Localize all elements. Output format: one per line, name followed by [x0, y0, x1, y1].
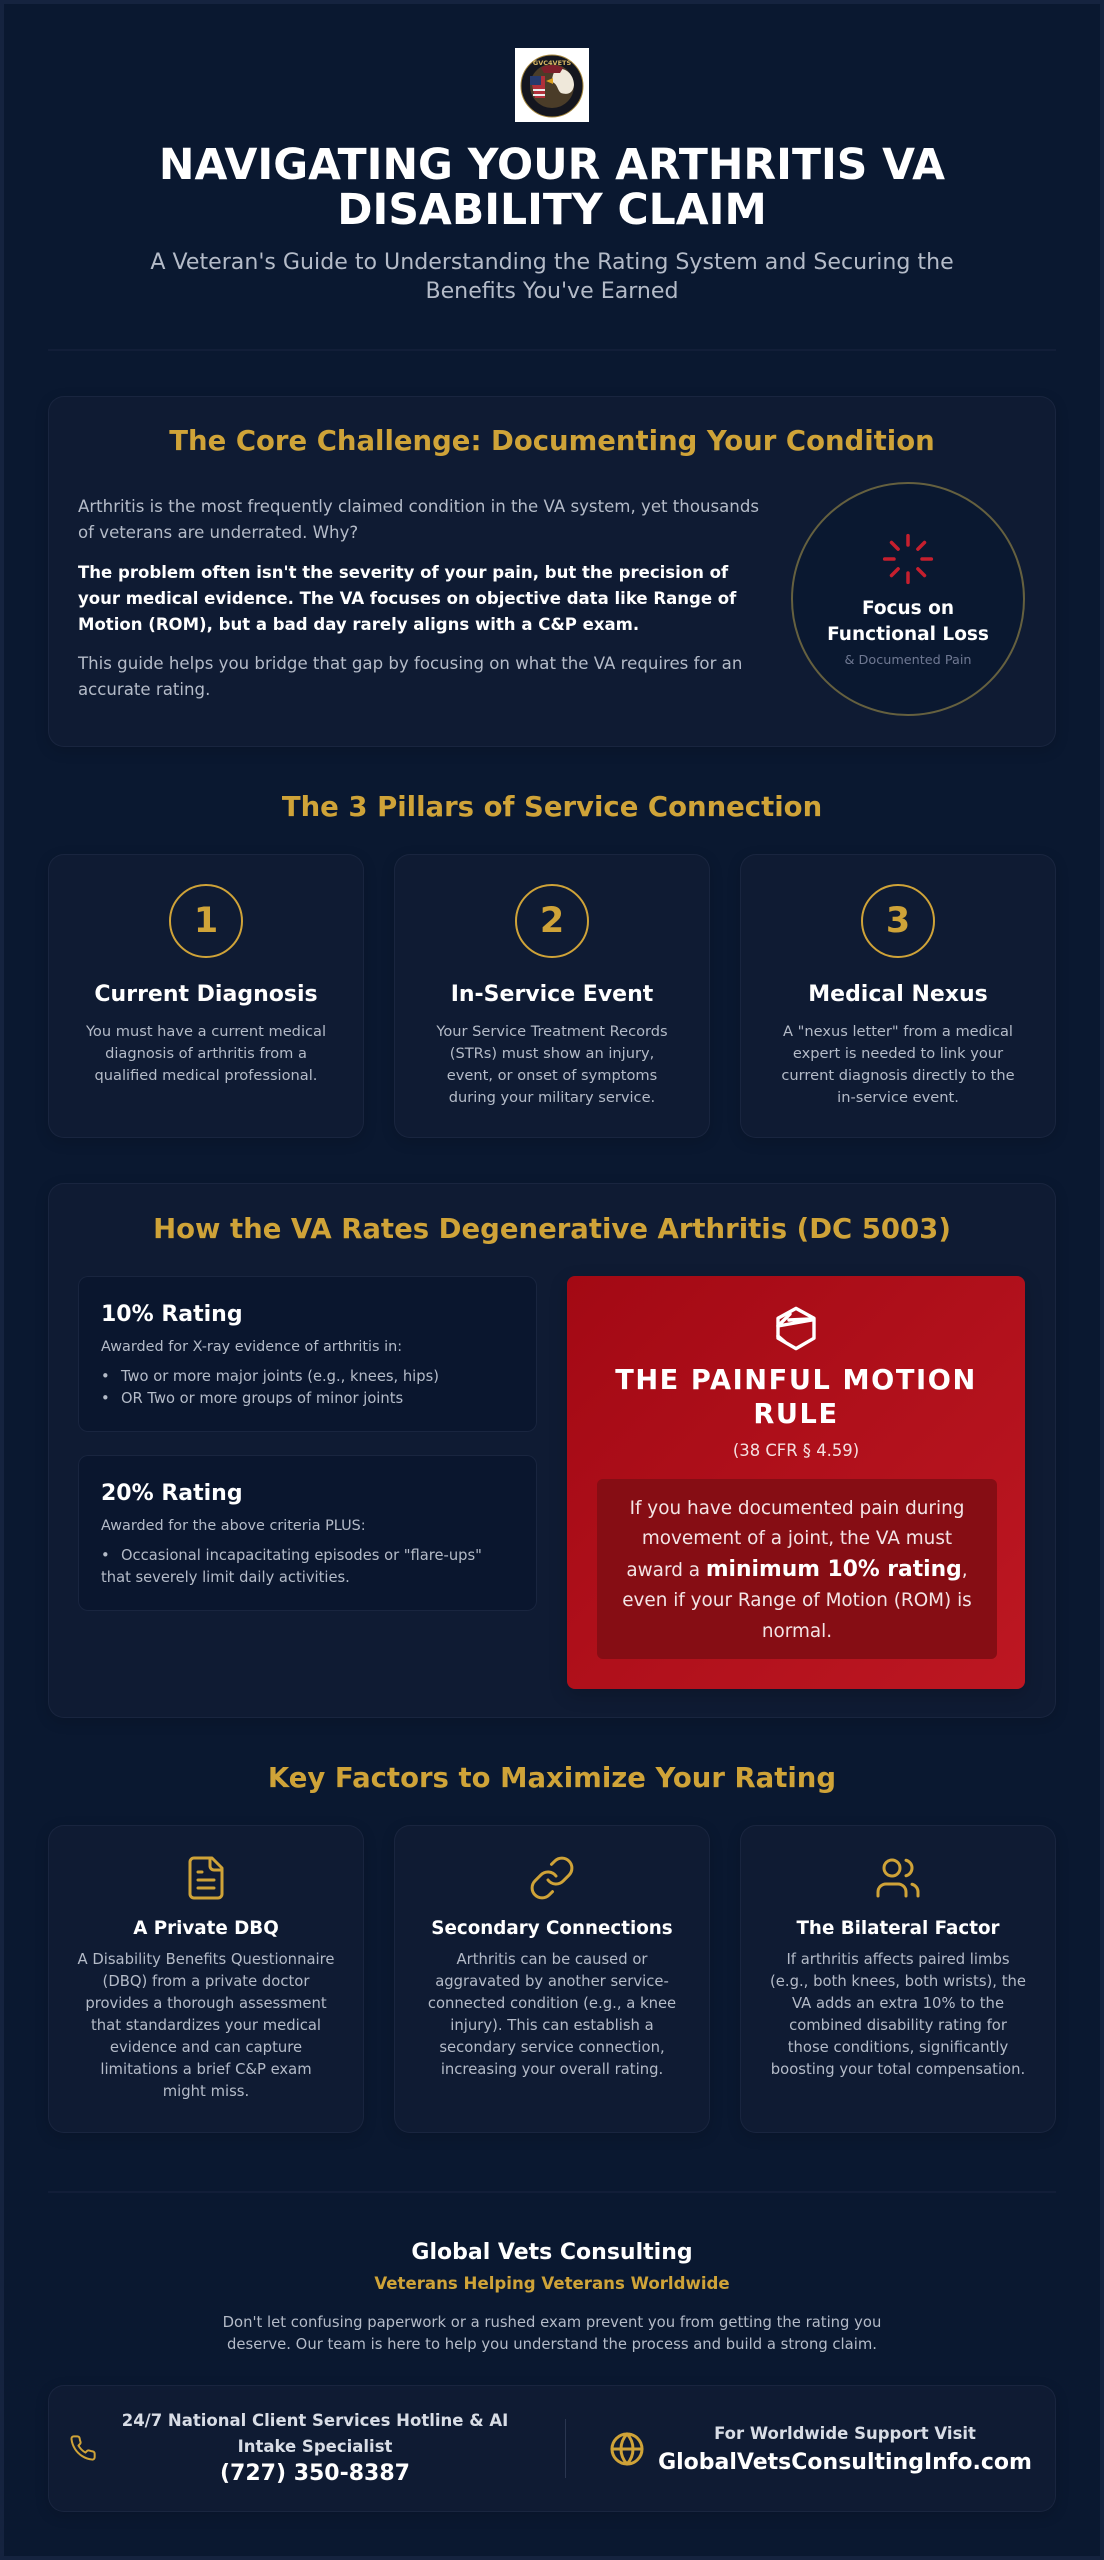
text: intro paragraph: of veterans are underrated. Why?	[78, 523, 358, 542]
secondary connections text: injury). This can establish a	[450, 2017, 654, 2034]
private DBQ text: A Disability Benefits Questionnaire	[78, 1950, 334, 1968]
rule explanation box: movement of a joint, the VA must	[642, 1528, 952, 1549]
panel: pillar 1	[48, 854, 364, 1138]
hotline label	[122, 2411, 508, 2456]
20% bullet: that severely limit daily activities.	[101, 1569, 350, 1586]
panel: pillar 3	[740, 854, 1056, 1138]
private DBQ title: A Private DBQ	[133, 1918, 279, 1939]
10% description: Awarded for X-ray evidence of arthritis in:	[101, 1339, 402, 1355]
number 2	[515, 884, 589, 958]
text: focus on functional loss: Focus on	[862, 598, 954, 619]
bilateral factor text: VA adds an extra 10% to the	[792, 1995, 1004, 2012]
icon: chain link	[530, 1856, 574, 1900]
heading: core challenge: The Core Challenge: Documenting Your Condition	[169, 425, 935, 457]
callout: functional loss circle	[791, 482, 1025, 716]
rule explanation box: award a minimum 10% rating,	[626, 1557, 968, 1582]
pillar 3 title: Medical Nexus	[808, 982, 988, 1007]
icon: phone	[70, 2435, 96, 2461]
20% heading: 20% Rating	[101, 1481, 243, 1506]
heading: key factors: Key Factors to Maximize Your Rating	[268, 1762, 836, 1794]
logo: GVC4VETS	[533, 59, 571, 67]
panel: core challenge	[48, 396, 1056, 747]
pillar 1 text: You must have a current medical	[86, 1023, 326, 1040]
10% bullets: Two or more major joints (e.g., knees, hips)	[121, 1368, 439, 1384]
panel: private DBQ	[48, 1825, 364, 2133]
footer: tagline: Veterans Helping Veterans Worldwide	[374, 2274, 730, 2293]
private DBQ text: provides a thorough assessment	[85, 1995, 327, 2012]
pillar 3 text	[781, 1023, 1015, 1106]
phone number: (727) 350-8387	[220, 2461, 410, 2486]
bilateral factor text	[770, 1950, 1026, 2078]
text: bold paragraph: Motion (ROM), but a bad day rarely aligns with a C&P exam.	[78, 615, 639, 634]
logo	[515, 48, 589, 122]
card: 10% rating	[78, 1276, 537, 1432]
pillar 2 title: In-Service Event	[451, 982, 653, 1007]
panel: pillar 2	[394, 854, 710, 1138]
footer: message: Don't let confusing paperwork or a rushed exam prevent you from getting the rating you	[223, 2314, 881, 2331]
bilateral factor text: If arthritis affects paired limbs	[786, 1950, 1010, 1968]
rule explanation box: If you have documented pain during	[630, 1498, 964, 1519]
text: intro paragraph: Arthritis is the most frequently claimed condition in the VA system, yet thousands	[78, 497, 759, 516]
secondary connections title: Secondary Connections	[431, 1918, 673, 1939]
10% bullets: •	[101, 1368, 110, 1384]
heading: how the VA rates: How the VA Rates Degenerative Arthritis (DC 5003)	[153, 1213, 951, 1245]
title: DISABILITY CLAIM	[337, 186, 767, 235]
text: closing paragraph: This guide helps you bridge that gap by focusing on what the VA requires for an	[78, 654, 742, 673]
private DBQ text: evidence and can capture	[110, 2039, 302, 2056]
secondary connections text: Arthritis can be caused or	[456, 1950, 648, 1968]
icon: document	[188, 1856, 224, 1900]
20% bullet: •	[101, 1546, 110, 1564]
pillar 2 text: Your Service Treatment Records	[436, 1023, 668, 1040]
painful motion title: RULE	[753, 1399, 839, 1430]
rule explanation box: normal.	[762, 1621, 832, 1642]
icon: people	[876, 1858, 920, 1898]
20% bullet: Occasional incapacitating episodes or "flare-ups"	[121, 1546, 482, 1564]
secondary connections text: increasing your overall rating.	[441, 2061, 663, 2078]
text: closing paragraph: accurate rating.	[78, 680, 210, 699]
hotline label: Intake Specialist	[238, 2437, 392, 2456]
text: bold paragraph: your medical evidence. The VA focuses on objective data like Range of	[78, 589, 736, 608]
pillar 3 text: in-service event.	[837, 1089, 959, 1106]
footer: message	[223, 2314, 881, 2353]
20% description: Awarded for the above criteria PLUS:	[101, 1518, 366, 1534]
subtitle	[150, 249, 954, 304]
private DBQ text: might miss.	[163, 2083, 249, 2100]
10% bullets: OR Two or more groups of minor joints	[121, 1390, 403, 1407]
bilateral factor text: (e.g., both knees, both wrists), the	[770, 1973, 1026, 1990]
hotline label: 24/7 National Client Services Hotline & AI	[122, 2411, 508, 2430]
icon: globe	[610, 2432, 644, 2466]
secondary connections text: connected condition (e.g., a knee	[428, 1995, 676, 2012]
10% bullets	[101, 1368, 439, 1407]
private DBQ text: that standardizes your medical	[91, 2017, 321, 2034]
heading: 3 pillars: The 3 Pillars of Service Connection	[282, 791, 822, 823]
title	[159, 141, 945, 235]
pillar 1 title: Current Diagnosis	[94, 982, 318, 1007]
worldwide label: For Worldwide Support Visit	[714, 2424, 976, 2443]
text: documented pain: & Documented Pain	[844, 653, 972, 668]
card: 20% rating	[78, 1455, 537, 1611]
panel: how the VA rates	[48, 1183, 1056, 1718]
pillar 2 text: event, or onset of symptoms	[447, 1067, 657, 1084]
painful motion title: THE PAINFUL MOTION	[615, 1365, 977, 1396]
pillar 1 text	[86, 1023, 326, 1084]
pillar 3 text: expert is needed to link your	[793, 1045, 1003, 1062]
vertical separator	[565, 2419, 566, 2478]
10% heading: 10% Rating	[101, 1302, 243, 1327]
private DBQ text: (DBQ) from a private doctor	[103, 1973, 309, 1990]
footer: company name: Global Vets Consulting	[411, 2240, 693, 2265]
private DBQ text: limitations a brief C&P exam	[100, 2061, 312, 2078]
bilateral factor text: combined disability rating for	[789, 2017, 1007, 2034]
pillar 3 text: A "nexus letter" from a medical	[783, 1023, 1013, 1040]
panel: bilateral factor	[740, 1825, 1056, 2133]
secondary connections text: aggravated by another service-	[435, 1973, 669, 1990]
footer: message: deserve. Our team is here to help you understand the process and build a strong claim.	[227, 2336, 877, 2353]
pillar 2 text: (STRs) must show an injury,	[450, 1045, 654, 1062]
icon: bandaged joint	[776, 1306, 816, 1350]
pillar 2 text: during your military service.	[449, 1089, 655, 1106]
number 1: 1	[194, 901, 218, 941]
20% bullet	[101, 1546, 482, 1586]
text: bold paragraph	[78, 563, 736, 634]
callout: painful motion rule	[567, 1276, 1025, 1689]
text: intro paragraph	[78, 497, 759, 542]
number 3	[861, 884, 935, 958]
number 2: 2	[540, 901, 564, 941]
website: GlobalVetsConsultingInfo.com	[658, 2450, 1032, 2475]
bilateral factor text: boosting your total compensation.	[771, 2061, 1025, 2078]
text: focus on functional loss: Functional Loss	[827, 624, 989, 645]
10% bullets: •	[101, 1390, 110, 1407]
bilateral factor text: those conditions, significantly	[788, 2039, 1008, 2056]
text: bold paragraph: The problem often isn't the severity of your pain, but the precision of	[78, 563, 728, 582]
bilateral factor title: The Bilateral Factor	[796, 1918, 1000, 1939]
CFR citation: (38 CFR § 4.59)	[733, 1441, 859, 1460]
icon: pain loader	[882, 534, 934, 584]
secondary connections text: secondary service connection,	[439, 2039, 665, 2056]
panel: secondary connections	[394, 1825, 710, 2133]
rule explanation box	[597, 1479, 997, 1659]
title: NAVIGATING YOUR ARTHRITIS VA	[159, 141, 945, 190]
subtitle: A Veteran's Guide to Understanding the Rating System and Securing the	[150, 249, 954, 275]
number 1	[169, 884, 243, 958]
subtitle: Benefits You've Earned	[425, 278, 679, 304]
pillar 1 text: diagnosis of arthritis from a	[105, 1045, 307, 1062]
pillar 2 text	[436, 1023, 668, 1106]
pillar 3 text: current diagnosis directly to the	[781, 1067, 1015, 1084]
text: closing paragraph	[78, 654, 742, 699]
text: focus on functional loss	[827, 598, 989, 645]
rule explanation box: even if your Range of Motion (ROM) is	[622, 1590, 972, 1611]
painful motion title	[615, 1365, 977, 1430]
private DBQ text	[78, 1950, 334, 2100]
panel: contact bar	[48, 2385, 1056, 2512]
secondary connections text	[428, 1950, 676, 2078]
pillar 1 text: qualified medical professional.	[95, 1067, 317, 1084]
number 3: 3	[886, 901, 910, 941]
